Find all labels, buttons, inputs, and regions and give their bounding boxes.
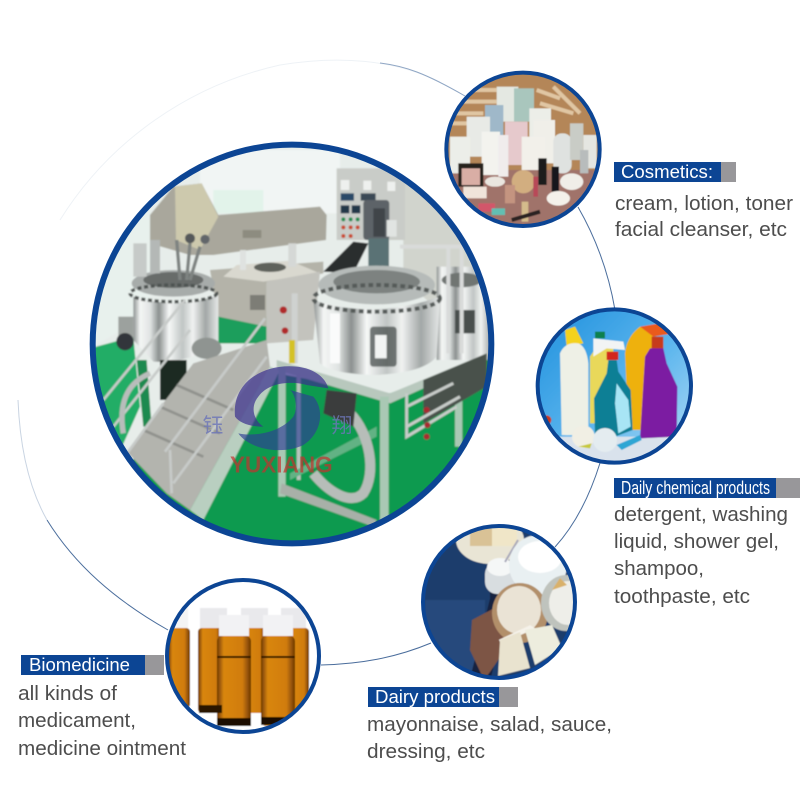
label: biomedicine: Biomedicine [29,655,130,675]
label: dairy products [367,687,612,763]
logo watermark: 翔 [332,415,352,438]
label: daily chemical products: shampoo, [614,558,704,580]
label: biomedicine [18,655,186,760]
label: dairy products: Dairy products [375,687,495,707]
table frame [276,360,442,405]
stairs [127,340,270,510]
label: biomedicine: medicine ointment [18,738,186,760]
label: daily chemical products: liquid, shower gel, [614,531,779,553]
right tank [436,266,488,362]
label: daily chemical products: toothpaste, etc [614,586,750,608]
label: daily chemical products [614,478,800,608]
label: biomedicine: medicament, [18,710,136,732]
circle photo: daily chemical bottles [537,307,693,467]
logo watermark: 钰 [203,415,223,438]
left tank [133,295,218,362]
circle photo: cosmetics [440,70,607,230]
homogenizer housing [210,262,323,327]
label: cosmetics: facial cleanser, etc [615,219,787,241]
label: biomedicine: all kinds of [18,683,117,705]
label: daily chemical products: detergent, washing [614,504,788,526]
label: dairy products: dressing, etc [367,741,485,763]
label: cosmetics: cream, lotion, toner [615,193,793,215]
main tank [313,297,440,375]
control panel [337,168,405,240]
railings [103,300,267,493]
logo watermark: YUXIANG [230,451,333,477]
label: dairy products: mayonnaise, salad, sauce, [367,714,612,736]
logo watermark [203,366,352,477]
main photo: vacuum emulsifying mixer machine [90,140,500,550]
label: cosmetics [614,162,793,241]
label: cosmetics: Cosmetics: [621,162,713,182]
connecting arc through the application circles [18,60,615,665]
circle photo: biomedicine amber bottles [165,578,321,734]
motor [363,200,389,240]
circle photo: dairy products [421,524,577,680]
